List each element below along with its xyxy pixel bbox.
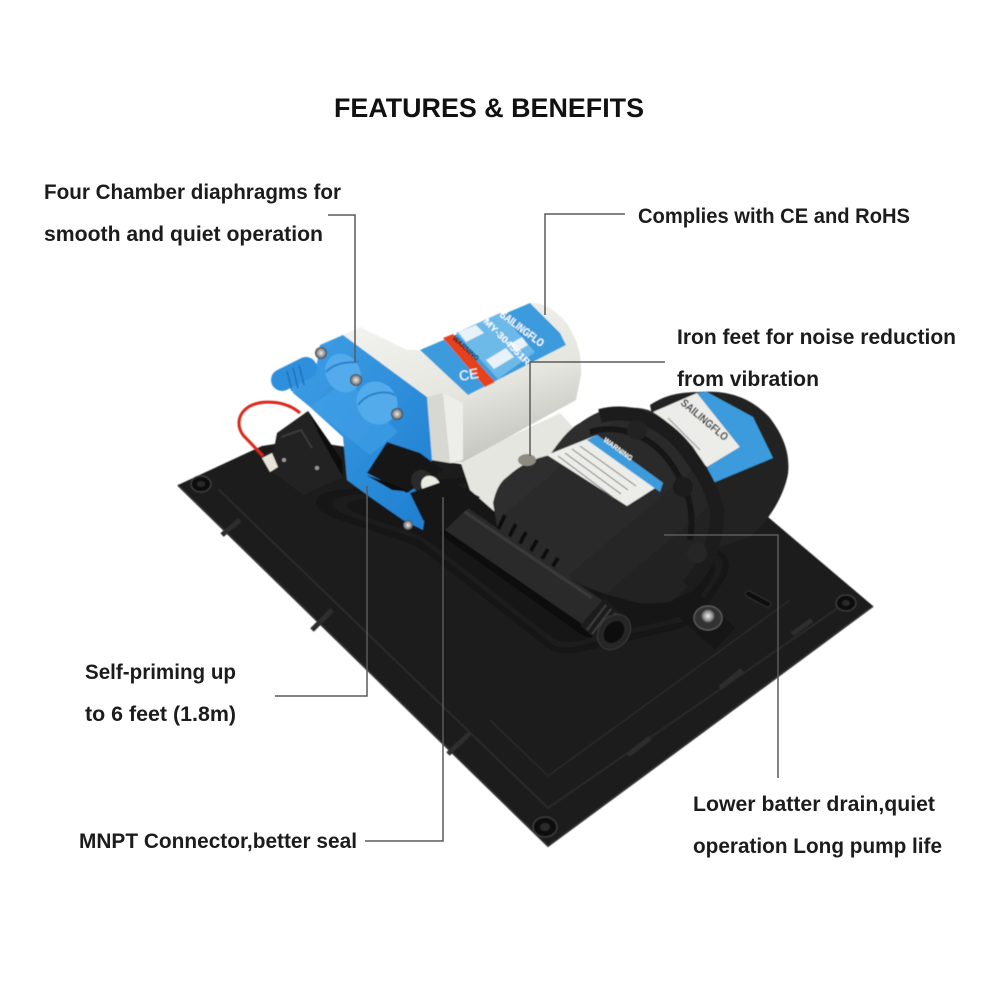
tank-side mounting foot <box>518 454 536 466</box>
plate slot <box>744 590 772 608</box>
pump motor <box>343 303 581 463</box>
shadow under pump <box>300 480 730 650</box>
tank rear label <box>653 392 773 483</box>
callout: self-priming: to 6 feet (1.8m) <box>85 703 236 726</box>
callout: four chamber diaphragms: smooth and quiet operation <box>44 223 323 246</box>
callout: iron feet <box>530 326 956 456</box>
motor label: WARNING <box>451 335 480 363</box>
tank front body <box>493 408 724 603</box>
motor label: MY-304551R <box>482 316 533 368</box>
callout: MNPT connector: MNPT Connector,better seal <box>79 830 357 853</box>
tank strap and bolt <box>673 590 735 650</box>
black pressure switch <box>262 411 343 495</box>
product photo: pump assembly <box>178 303 873 846</box>
callout: four chamber diaphragms <box>44 181 355 362</box>
motor label <box>420 303 566 395</box>
tank fins <box>498 515 558 572</box>
plate screws <box>191 476 856 837</box>
motor label: CE <box>458 365 480 384</box>
callout: MNPT connector <box>79 497 443 853</box>
diaphragm chambers <box>318 347 368 399</box>
motor base feet <box>460 413 585 512</box>
callout: lower battery drain <box>664 535 942 858</box>
tank rear label: SAILINGFLO <box>678 397 731 444</box>
inlet port <box>282 368 306 380</box>
hose fitting and wing nut <box>366 442 480 533</box>
tank rear section <box>650 392 788 560</box>
tank flange ring <box>590 414 717 586</box>
callout: four chamber diaphragms: Four Chamber diaphragms for <box>44 181 341 204</box>
callout: lower battery drain: operation Long pump life <box>693 835 942 858</box>
callout: self-priming: Self-priming up <box>85 661 236 684</box>
callout: iron feet: from vibration <box>677 368 819 391</box>
head screws <box>315 347 327 359</box>
callout: iron feet: Iron feet for noise reduction <box>677 326 956 349</box>
title: FEATURES & BENEFITS <box>334 93 644 123</box>
callout: self-priming <box>85 486 367 726</box>
tank front label <box>547 435 663 506</box>
tank front label: WARNING <box>602 437 634 463</box>
red wire <box>239 402 300 456</box>
motor label: SAILINGFLO <box>497 309 546 350</box>
callout: complies with CE and RoHS <box>545 205 910 315</box>
mounting plate <box>178 440 873 846</box>
callout: complies with CE and RoHS: Complies with CE and RoHS <box>638 205 910 228</box>
callout: lower battery drain: Lower batter drain,quiet <box>693 793 935 816</box>
hose with threaded end <box>452 506 638 656</box>
blue pump head <box>282 335 432 530</box>
